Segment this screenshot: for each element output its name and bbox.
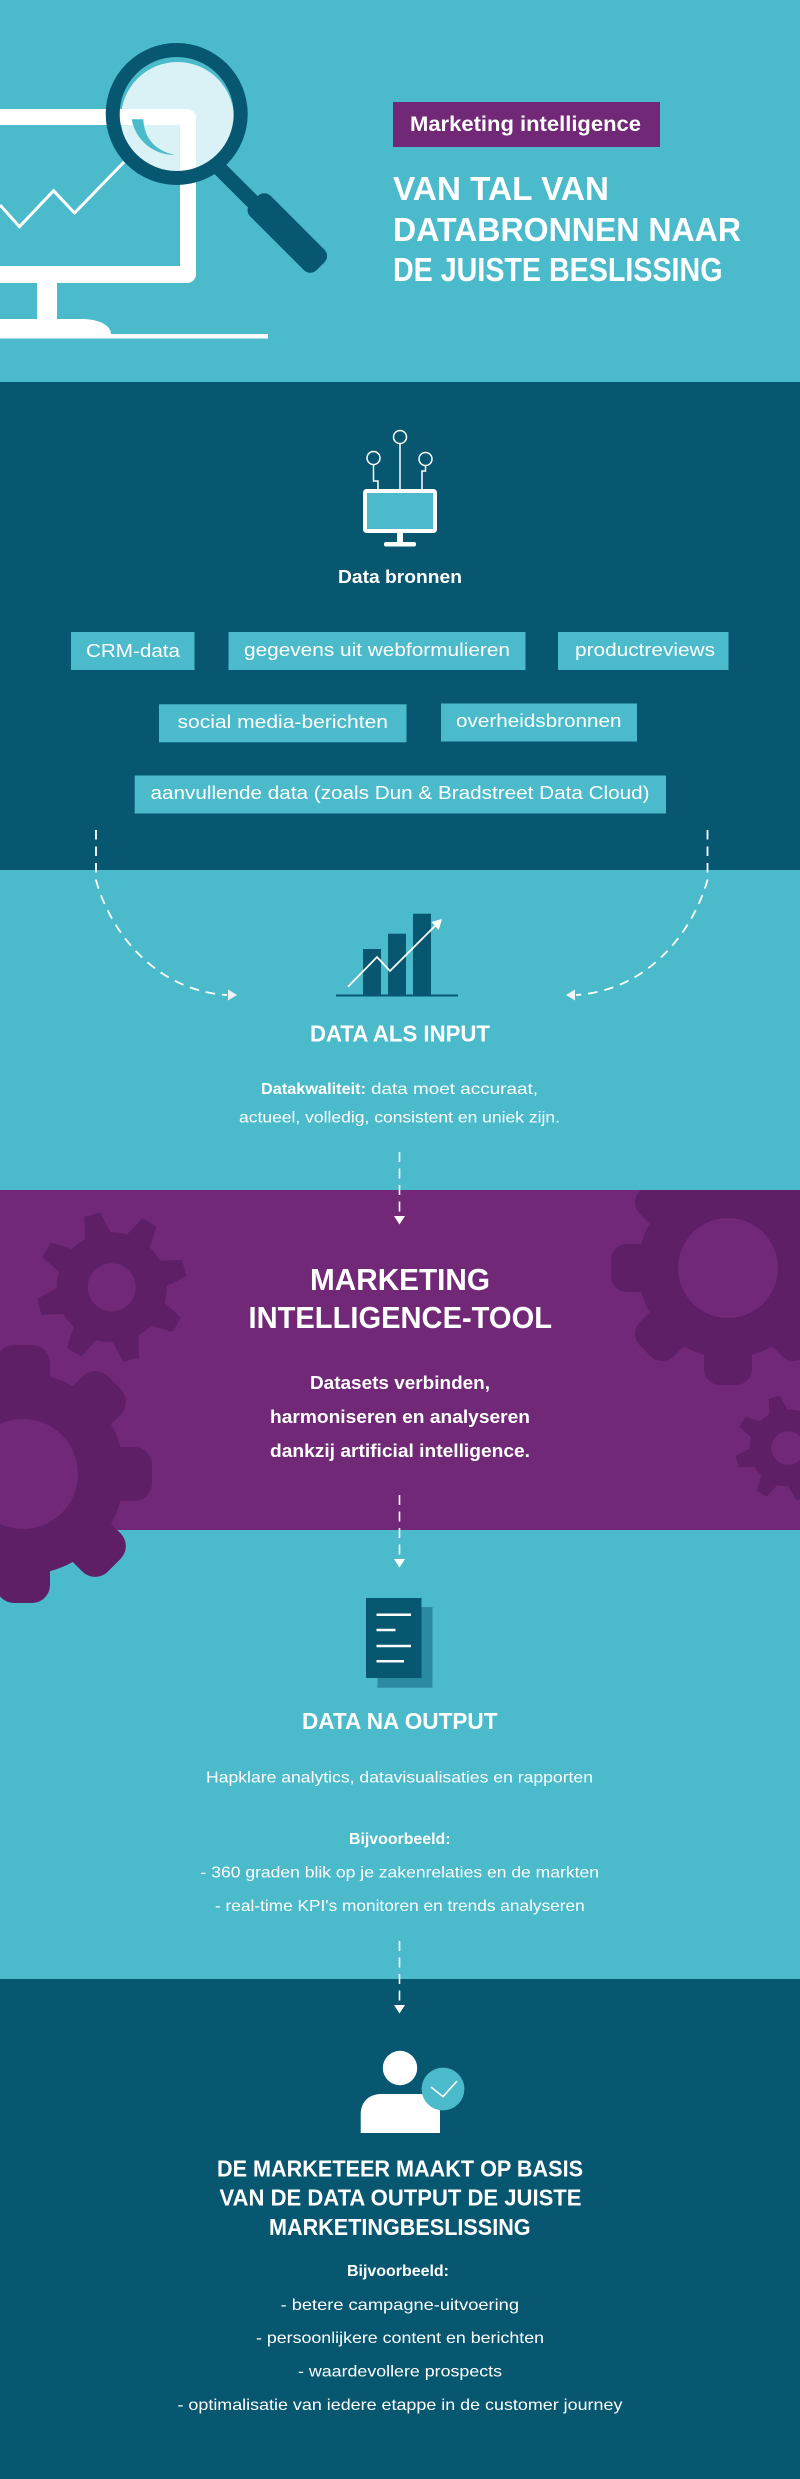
text: decision examples: - optimalisatie van iedere etappe in de customer journey <box>178 2397 622 2414</box>
heading: marketeer decision: MARKETINGBESLISSING <box>269 2214 531 2240</box>
badge: Marketing intelligence: Marketing intelligence <box>410 113 641 136</box>
source: CRM-data <box>71 632 194 670</box>
icon: bar chart with rising arrow <box>336 914 458 996</box>
text: output examples: Bijvoorbeeld: <box>349 1831 450 1848</box>
icon: monitor with data connections <box>365 430 435 546</box>
text: decision examples: - waardevollere prospects <box>298 2364 502 2381</box>
text: decision examples: - persoonlijkere content en berichten <box>256 2330 544 2347</box>
heading: Marketing intelligence-tool <box>248 1262 552 1335</box>
source: aanvullende data <box>135 776 666 814</box>
heading: Data als input: DATA ALS INPUT <box>310 1021 490 1047</box>
arrow: tool to output <box>394 1495 405 1568</box>
icon: document <box>366 1598 432 1688</box>
source: aanvullende data: aanvullende data (zoals Dun & Bradstreet Data Cloud) <box>150 783 650 803</box>
heading: marketeer decision <box>217 2156 583 2240</box>
text: output examples: - 360 graden blik op je zakenrelaties en de markten <box>200 1865 599 1882</box>
icon: large gear left <box>0 1345 152 1603</box>
source: overheidsbronnen: overheidsbronnen <box>456 711 622 731</box>
heading: Data bronnen: Data bronnen <box>338 567 462 587</box>
title: VAN TAL VAN <box>393 170 609 207</box>
text: datakwaliteit <box>239 1081 560 1127</box>
arrow: input to tool <box>394 1152 405 1224</box>
text: hapklare analytics: Hapklare analytics, datavisualisaties en rapporten <box>206 1770 593 1787</box>
text: datakwaliteit: data moet accuraat, <box>371 1081 538 1098</box>
heading: Marketing intelligence-tool: MARKETING <box>310 1262 490 1297</box>
text: tool description <box>270 1373 530 1461</box>
text: output examples: - real-time KPI's monitoren en trends analyseren <box>215 1898 585 1915</box>
source: social media-berichten: social media-berichten <box>178 712 388 732</box>
icon: small gear top left <box>36 1211 188 1363</box>
heading: marketeer decision: VAN DE DATA OUTPUT DE JUISTE <box>220 2185 582 2211</box>
title <box>393 170 741 288</box>
source: gegevens uit webformulieren <box>228 632 526 670</box>
arrow: right curved from sources to input <box>566 830 708 1000</box>
panel: marketeer decision <box>0 1979 800 2479</box>
text: decision examples: Bijvoorbeeld: <box>347 2263 449 2280</box>
source: overheidsbronnen <box>441 704 637 742</box>
panel: data als input <box>0 870 800 1190</box>
title: DATABRONNEN NAAR <box>393 211 741 248</box>
source: productreviews: productreviews <box>575 640 715 660</box>
source: productreviews <box>558 632 728 670</box>
text: tool description: harmoniseren en analyseren <box>270 1407 530 1427</box>
text: tool description: Datasets verbinden, <box>310 1373 490 1393</box>
text: datakwaliteit: Datakwaliteit: <box>261 1081 366 1098</box>
badge: Marketing intelligence <box>393 102 660 147</box>
text: decision examples <box>178 2263 622 2414</box>
source: CRM-data: CRM-data <box>86 641 181 661</box>
heading: Data na output: DATA NA OUTPUT <box>302 1708 498 1734</box>
icon: person with check mark <box>361 2051 464 2133</box>
source: social media-berichten <box>159 704 406 742</box>
arrow: output to marketeer <box>394 1941 405 2014</box>
text: datakwaliteit: actueel, volledig, consistent en uniek zijn. <box>239 1110 560 1127</box>
title: DE JUISTE BESLISSING <box>393 251 722 288</box>
icon: monitor with magnifying glass <box>0 50 331 338</box>
arrow: left curved from sources to input <box>96 830 237 1000</box>
text: output examples <box>200 1831 599 1915</box>
panel: data na output <box>0 1530 800 1979</box>
panel: header <box>0 43 740 338</box>
icon: large gear right <box>611 1190 800 1385</box>
panel: data bronnen <box>0 382 800 870</box>
text: decision examples: - betere campagne-uitvoering <box>281 2297 519 2314</box>
heading: marketeer decision: DE MARKETEER MAAKT OP BASIS <box>217 2156 583 2182</box>
source: gegevens uit webformulieren: gegevens uit webformulieren <box>244 640 510 660</box>
heading: Marketing intelligence-tool: INTELLIGENCE-TOOL <box>248 1300 552 1335</box>
icon: small gear right <box>735 1395 800 1501</box>
panel: marketing intelligence tool <box>0 1151 800 1603</box>
text: tool description: dankzij artificial intelligence. <box>270 1441 530 1461</box>
